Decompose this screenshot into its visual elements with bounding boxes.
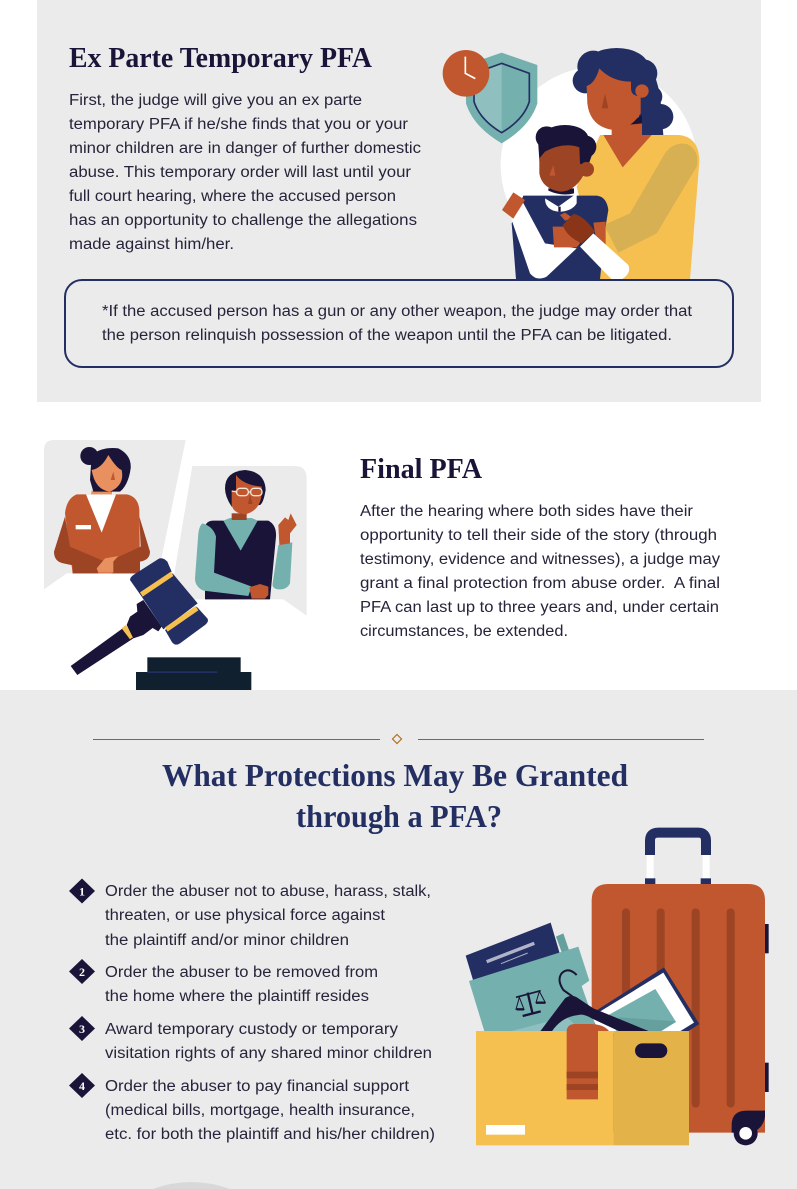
text block: final PFA description: opportunity to tell their side of the story (through [360,527,717,544]
text block: final PFA description: After the hearing where both sides have their [360,503,693,520]
callout: weapon notice [65,280,733,367]
list item 3: Award temporary custody or temporary [105,1021,398,1038]
text block: ex parte description: full court hearing, where the accused person [69,188,396,205]
callout: weapon notice: *If the accused person has a gun or any other weapon, the judge may order that [102,303,693,320]
list item 1: 1 [79,884,85,898]
heading: what protections may be granted [162,757,628,834]
illustration: courtroom with gavel [44,440,307,690]
list item 3: visitation rights of any shared minor children [105,1045,432,1062]
icon: gavel sound block [136,657,251,690]
list item 3: 3 [79,1022,85,1036]
list item 3 [69,1016,432,1062]
text block: final PFA description: testimony, evidence and witnesses), a judge may [360,551,720,568]
list item 4: etc. for both the plaintiff and his/her children) [105,1126,435,1143]
figure: man in vest [195,470,297,599]
text block: final PFA description: circumstances, be extended. [360,623,568,640]
list: protections [69,878,435,1143]
icon: moving box [476,1024,689,1145]
panel: final PFA [44,440,720,690]
list item 2: 2 [79,965,85,979]
list item 1: the plaintiff and/or minor children [105,932,349,949]
list item 4: (medical bills, mortgage, health insurance, [105,1102,415,1119]
text block: ex parte description: made against him/her. [69,236,234,253]
icon: gavel [71,558,208,675]
panel: ex parte temporary PFA [37,0,761,402]
icon: documents [466,923,598,1033]
text block: ex parte description: First, the judge will give you an ex parte [69,92,362,109]
heading: what protections may be granted: through a PFA? [296,798,502,834]
illustration: mother and child with shield and clock [443,48,699,279]
list item 1: threaten, or use physical force against [105,907,386,924]
icon: scales of justice [516,991,545,1016]
figure: woman in orange [54,447,150,573]
icon: shield [466,53,537,143]
list item 4: Order the abuser to pay financial support [105,1078,410,1095]
figure: child [502,125,629,279]
icon: suitcase [592,833,769,1145]
icon: picture frame [587,967,699,1037]
text block: final PFA description [360,503,720,640]
list item 2: Order the abuser to be removed from [105,964,378,981]
list item 2: the home where the plaintiff resides [105,988,369,1005]
list item 1: Order the abuser not to abuse, harass, stalk, [105,883,431,900]
icon: clock [443,50,489,97]
list item 4 [69,1073,435,1143]
heading: what protections may be granted: What Protections May Be Granted [162,757,628,793]
decorative circle cut off at page bottom [153,1182,230,1189]
heading: ex parte temporary PFA: Ex Parte Temporary PFA [69,43,373,74]
panel: what protections may be granted [0,690,797,1189]
heading: final PFA: Final PFA [360,454,483,485]
list item 1 [69,878,431,949]
text block: ex parte description: abuse. This temporary order will last until your [69,164,411,181]
text block: final PFA description: PFA can last up to three years and, under certain [360,599,719,616]
icon: hanger [540,970,650,1032]
illustration: suitcase and moving box [466,833,769,1145]
list item 2 [69,959,378,1005]
text block: final PFA description: grant a final protection from abuse order. A final [360,575,720,592]
list item 4: 4 [79,1079,85,1093]
text block: ex parte description: has an opportunity to challenge the allegations [69,212,417,229]
text block: ex parte description: temporary PFA if he/she finds that you or your [69,116,408,133]
figure: mother [573,48,699,279]
text block: ex parte description [69,92,421,253]
text block: ex parte description: minor children are in danger of further domestic [69,140,421,157]
callout: weapon notice: the person relinquish possession of the weapon until the PFA can be litigated. [102,327,672,344]
